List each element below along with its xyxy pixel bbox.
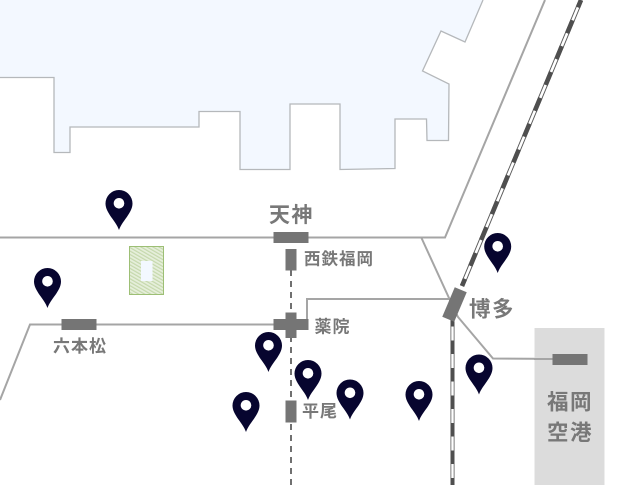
label: Hirao: 平尾 [302, 402, 338, 421]
station: Yakuin [274, 312, 308, 338]
label: Yakuin: 薬院 [314, 318, 350, 336]
sea and coastline [0, 0, 483, 170]
pin 9 [466, 354, 492, 394]
airport line inside area [534, 358, 553, 360]
JR line north [462, 0, 581, 286]
subway line: Tenjin to Hakata [0, 0, 545, 238]
subway line: Ropponmatsu to Yakuin [0, 324, 291, 400]
pin 5 [294, 360, 322, 400]
label: Hakata: 博多 [469, 298, 515, 322]
pin 3 [484, 233, 511, 273]
park [130, 246, 164, 294]
station: Ropponmatsu [62, 319, 96, 330]
pin 6 [336, 380, 364, 420]
pin 7 [232, 392, 260, 432]
JR line south [450, 320, 454, 485]
label: Nishitetsu Fukuoka: 西鉄福岡 [304, 250, 374, 268]
subway line: Yakuin to Hakata [291, 299, 452, 324]
pin 4 [255, 332, 282, 372]
station: Tenjin [274, 232, 308, 243]
pin 8 [406, 381, 432, 421]
label: Airport: 空港 [547, 421, 593, 445]
airport area [534, 328, 604, 485]
label: Tenjin: 天神 [269, 204, 314, 227]
station: Nishitetsu Fukuoka [286, 249, 296, 270]
label: Ropponmatsu: 六本松 [53, 337, 107, 356]
pin 2 [34, 268, 61, 308]
Nishitetsu dashed line [290, 270, 292, 485]
station: Hakata [442, 287, 467, 322]
station: Fukuoka Airport [552, 354, 588, 365]
station: Hirao [286, 400, 296, 422]
pin 1 [106, 190, 132, 230]
subway line: Hakata to airport [422, 238, 570, 359]
label: Fukuoka: 福岡 [547, 390, 593, 414]
